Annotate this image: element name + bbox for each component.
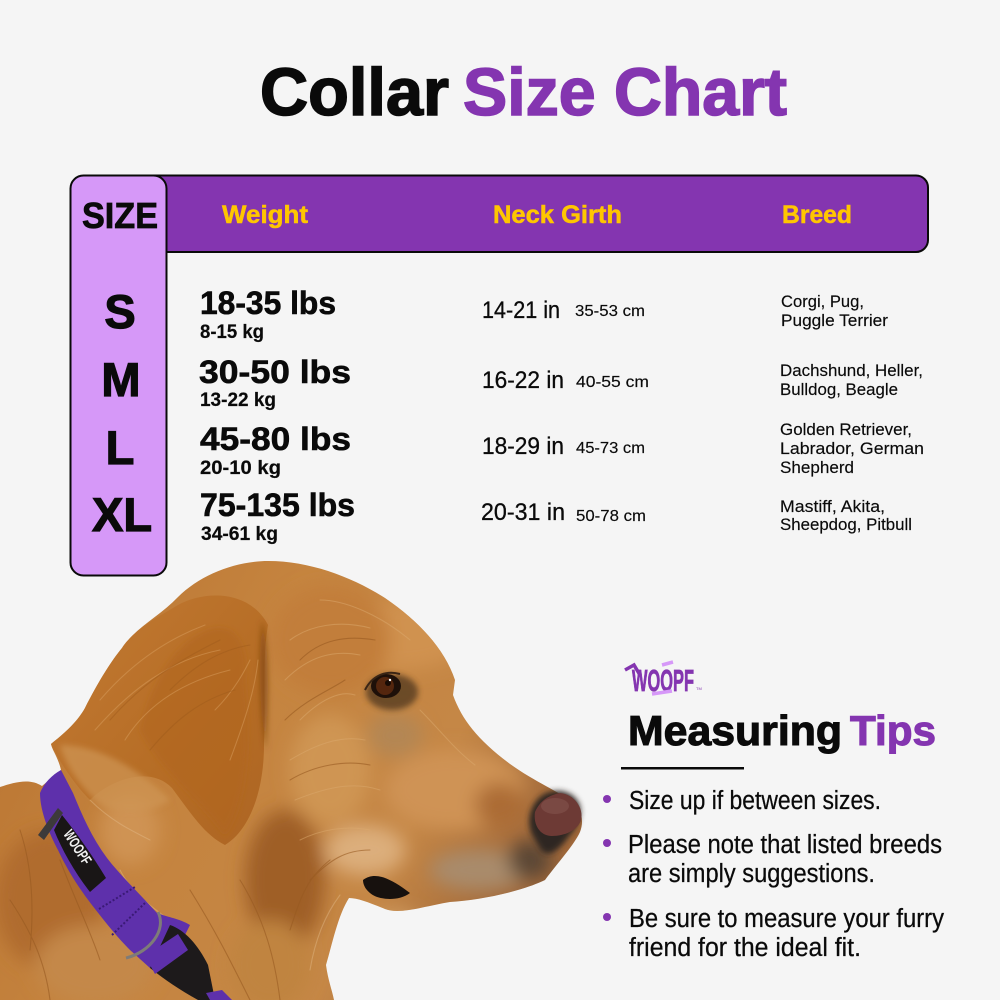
breed S (781, 293, 889, 330)
tip 2: Please note that listed breeds (628, 831, 942, 859)
collar patch (54, 815, 106, 892)
breed L: Shepherd (780, 459, 854, 477)
neck girth column (481, 297, 649, 526)
weight M: 30-50 lbs (199, 354, 351, 390)
title: Size Chart (463, 55, 787, 130)
tip 3: Be sure to measure your furry (629, 905, 944, 933)
title: Collar (260, 55, 449, 130)
weight S metric: 8-15 kg (200, 322, 264, 343)
header: neck girth: Neck Girth (493, 201, 622, 229)
mouth (363, 876, 410, 899)
tip 2 (603, 831, 942, 888)
measuring tips heading: Measuring (628, 707, 842, 754)
tip 3 (603, 905, 944, 962)
dog photo illustration (0, 555, 600, 1000)
breed S: Corgi, Pug, (781, 293, 864, 311)
breed L (780, 421, 924, 477)
weight M metric: 13-22 kg (200, 390, 276, 411)
weight XL metric: 34-61 kg (201, 524, 278, 545)
neck XL metric: 50-78 cm (576, 508, 646, 525)
weight column (199, 285, 355, 545)
weight L metric: 20-10 kg (200, 458, 281, 479)
size S: S (104, 285, 136, 338)
measuring tips heading: Tips (850, 707, 936, 754)
heading underline (621, 767, 744, 770)
breed XL (780, 498, 912, 534)
header: breed: Breed (782, 201, 852, 229)
fur strokes (10, 600, 475, 1000)
breed L: Labrador, German (780, 440, 924, 458)
nose (529, 791, 582, 854)
size L: L (106, 421, 134, 474)
breed column (780, 293, 924, 534)
brand logo: TM (696, 686, 702, 691)
table header band (150, 176, 928, 252)
neck S: 14-21 in (482, 297, 560, 324)
title (260, 55, 787, 130)
tip 2: are simply suggestions. (628, 860, 875, 888)
size XL: XL (92, 488, 152, 541)
breed M (780, 362, 923, 399)
size heading: SIZE (82, 195, 158, 236)
neck L metric: 45-73 cm (576, 440, 645, 457)
neck M: 16-22 in (482, 367, 564, 394)
tip 3: friend for the ideal fit. (629, 934, 861, 962)
breed L: Golden Retriever, (780, 421, 912, 439)
size column (70, 176, 166, 576)
neck XL: 20-31 in (481, 499, 565, 526)
measuring tips heading (628, 707, 936, 754)
size M: M (101, 353, 141, 406)
neck S metric: 35-53 cm (575, 303, 645, 320)
ear (51, 595, 268, 845)
breed S: Puggle Terrier (781, 312, 889, 330)
eye patch (366, 674, 418, 710)
neck M metric: 40-55 cm (576, 374, 649, 391)
dog body and head (0, 555, 600, 1000)
weight XL: 75-135 lbs (200, 487, 355, 523)
breed M: Bulldog, Beagle (780, 381, 898, 399)
collar patch: WOOPF (60, 827, 95, 868)
header: weight: Weight (222, 201, 309, 229)
brand logo: WOOPF (632, 663, 694, 698)
tip 1: Size up if between sizes. (629, 787, 881, 815)
brand logo (625, 662, 702, 698)
collar (38, 770, 232, 1000)
breed M: Dachshund, Heller, (780, 362, 923, 380)
weight S: 18-35 lbs (200, 285, 336, 321)
breed XL: Sheepdog, Pitbull (780, 516, 912, 534)
neck L: 18-29 in (482, 433, 564, 460)
eye (365, 673, 401, 698)
weight L: 45-80 lbs (200, 421, 351, 457)
breed XL: Mastiff, Akita, (780, 498, 885, 516)
